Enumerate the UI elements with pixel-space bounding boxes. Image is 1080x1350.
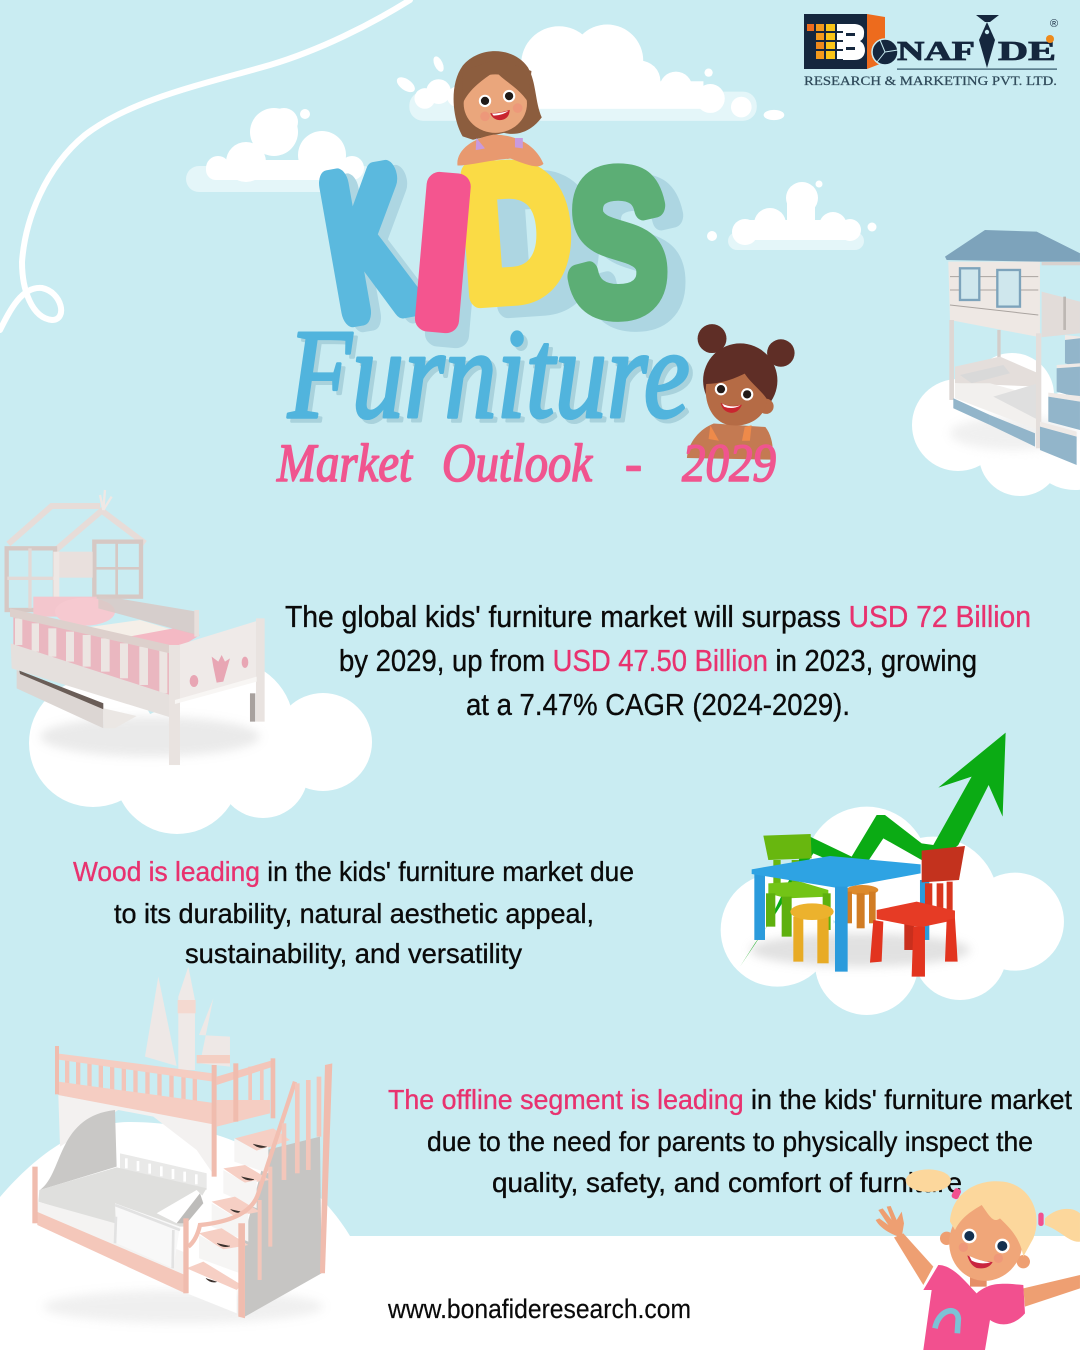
stair handrail and posts xyxy=(188,1082,295,1247)
side platform rail xyxy=(217,1060,273,1085)
castle spires xyxy=(145,977,177,1066)
drawer xyxy=(17,670,103,728)
paragraph: offline segment xyxy=(388,1084,1072,1198)
cloud: top centre xyxy=(394,25,784,121)
character: girl above title xyxy=(454,51,543,166)
paragraph: offline segment: quality, safety, and comfort of furniture xyxy=(492,1167,962,1198)
logo: Bonafide Research: ® xyxy=(1050,18,1058,30)
cloud: top right xyxy=(707,180,876,250)
head and neck xyxy=(970,1273,987,1287)
table xyxy=(754,873,765,940)
front rail xyxy=(13,617,170,697)
hair buns xyxy=(698,324,726,353)
arch xyxy=(40,1110,117,1190)
paragraph: market size: at a 7.47% CAGR (2024-2029). xyxy=(466,687,850,722)
far rail xyxy=(98,595,197,635)
paragraph: wood segment: to its durability, natural aesthetic appeal, xyxy=(114,898,594,929)
letter shadows: S xyxy=(588,146,683,359)
decorative swirl line xyxy=(0,0,410,330)
letter shadows xyxy=(323,141,683,379)
drawer band xyxy=(37,1212,185,1293)
bedding xyxy=(33,597,97,617)
character: waving blonde girl xyxy=(876,1169,1080,1350)
side board xyxy=(11,643,170,717)
paragraph: wood segment: sustainability, and versatility xyxy=(185,938,522,969)
heading: Furniture: Furniture xyxy=(287,303,690,445)
posts and legs xyxy=(169,645,180,765)
growth arrow xyxy=(740,733,1006,967)
upper railing xyxy=(65,1058,197,1110)
roof beams xyxy=(8,506,145,551)
letter shadows: D xyxy=(485,141,602,343)
letter shadows: I xyxy=(416,157,489,379)
ponytails xyxy=(906,1169,951,1192)
title: KIDS balloon letters xyxy=(313,131,683,379)
heading: Furniture: Furniture xyxy=(291,307,694,449)
lower slats xyxy=(120,1153,207,1190)
paragraph: offline segment: The offline segment is leading in the kids' furniture market xyxy=(388,1084,1072,1115)
heading: Market Outlook - 2029: - xyxy=(625,433,642,493)
logo box xyxy=(804,14,867,69)
illustration: cloud under toddler bed xyxy=(29,660,372,834)
illustration: blue house bunk bed on cloud xyxy=(912,230,1080,496)
paragraph: wood segment xyxy=(73,856,634,969)
logo wordmark: NAF xyxy=(897,36,975,66)
green chair xyxy=(763,834,812,860)
heading: Market Outlook - 2029: 2029 xyxy=(682,433,776,493)
bunk bed xyxy=(945,230,1080,465)
arms and shoulders xyxy=(457,135,543,166)
letter S: S xyxy=(570,136,665,349)
shirt xyxy=(923,1265,1025,1350)
grey stair side panel xyxy=(245,1137,322,1317)
logo: Bonafide Research xyxy=(804,14,1058,88)
letter K: K xyxy=(313,137,422,352)
red chair xyxy=(922,846,965,882)
letter D: D xyxy=(457,131,574,333)
illustration: toddler house bed xyxy=(7,490,265,765)
rainbow pocket xyxy=(935,1311,958,1333)
yellow stool xyxy=(793,917,803,962)
paragraph: market size xyxy=(285,599,1031,722)
face xyxy=(464,74,527,133)
mattress xyxy=(38,1167,207,1227)
logo tagline: RESEARCH & MARKETING PVT. LTD. xyxy=(804,73,1057,88)
illustration: kids table set with growth arrow on cloud xyxy=(721,733,1064,1015)
heading: Market Outlook - 2029: Outlook xyxy=(442,433,593,493)
window frames xyxy=(7,548,55,610)
cloud xyxy=(721,807,1064,1015)
letter I: I xyxy=(406,142,479,364)
heading: Market Outlook - 2029 xyxy=(276,433,776,493)
arms xyxy=(894,1233,933,1285)
cloud xyxy=(912,353,1080,496)
heading: Market Outlook - 2029: Market xyxy=(276,433,414,493)
bottom white ground and left cloud xyxy=(0,1122,1080,1350)
website url: www.bonafideresearch.com xyxy=(387,1294,691,1324)
character: girl with buns xyxy=(687,324,795,460)
guard rail xyxy=(115,1203,180,1268)
paragraph: offline segment: due to the need for parents to physically inspect the xyxy=(427,1126,1033,1157)
hair xyxy=(454,51,542,140)
head xyxy=(703,343,777,418)
stair steps xyxy=(187,1128,290,1313)
letter shadows: K xyxy=(323,142,432,357)
body xyxy=(687,424,773,460)
orange stool xyxy=(846,885,878,895)
illustration: castle bunk bed xyxy=(32,967,332,1323)
paragraph: market size: by 2029, up from USD 47.50 Billion in 2023, growing xyxy=(339,643,977,678)
cloud: top left xyxy=(186,108,376,192)
paragraph: wood segment: Wood is leading in the kids' furniture market due xyxy=(73,856,634,887)
footboard xyxy=(173,620,260,703)
paragraph: market size: The global kids' furniture market will surpass USD 72 Billion xyxy=(285,599,1031,634)
under-bed white panel xyxy=(58,1095,215,1177)
logo: Bonafide Research: DE xyxy=(998,36,1056,66)
